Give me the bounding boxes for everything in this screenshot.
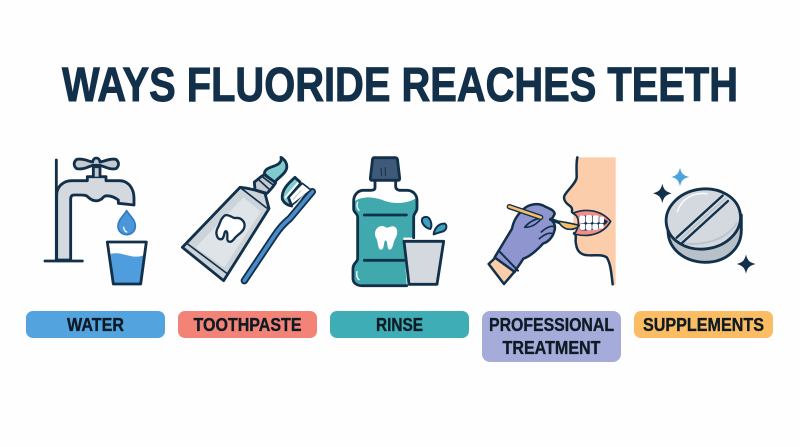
- icon: toothpaste and toothbrush: [182, 157, 312, 281]
- toothbrush handle: [244, 192, 312, 281]
- label: supplements: SUPPLEMENTS: [643, 315, 764, 335]
- profile line: [564, 157, 613, 284]
- face: [564, 157, 616, 285]
- icon: water tap and glass: [45, 158, 146, 284]
- bristles: [288, 183, 311, 205]
- label: toothpaste: [178, 311, 317, 338]
- teeth and gums: [573, 210, 611, 235]
- paste on brush: [282, 177, 300, 206]
- label: supplements: [634, 311, 773, 338]
- bottle: [353, 180, 417, 286]
- label: water: [26, 311, 165, 338]
- cap: [370, 158, 400, 180]
- score groove: [677, 196, 728, 243]
- label: professional treatment: PROFESSIONAL: [489, 315, 614, 335]
- label: rinse: [330, 311, 469, 338]
- cuff skin: [489, 253, 516, 284]
- glove: [495, 204, 555, 272]
- sparkle: upper dark: [653, 184, 672, 203]
- tube neck: [254, 175, 276, 193]
- label: professional treatment: TREATMENT: [502, 338, 601, 358]
- tooth emblem: [375, 226, 397, 250]
- sparkle: lower dark: [737, 254, 756, 274]
- cup: [404, 241, 444, 284]
- tablet face: [662, 184, 744, 254]
- splash drops: [422, 217, 431, 229]
- label: water: WATER: [67, 315, 124, 335]
- icon: professional fluoride application: [489, 157, 616, 285]
- icon: fluoride tablet with sparkles: [653, 168, 756, 274]
- applicator stick: [509, 207, 541, 217]
- toothpaste squeeze: [264, 157, 287, 183]
- label: rinse: RINSE: [376, 315, 423, 335]
- tablet edge: [668, 215, 741, 262]
- tooth emblem: [216, 215, 245, 242]
- label: toothpaste: TOOTHPASTE: [194, 315, 302, 335]
- tube body: [182, 187, 269, 281]
- icon: mouthwash bottle and cup: [353, 158, 446, 286]
- sparkle: blue: [671, 168, 689, 186]
- label: professional treatment: [482, 311, 621, 362]
